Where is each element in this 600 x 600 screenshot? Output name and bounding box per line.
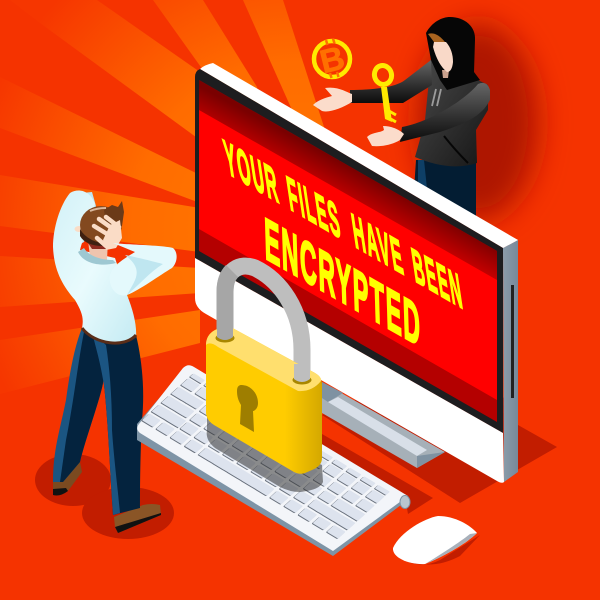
shackle right foot [292, 364, 312, 384]
hand on head [94, 217, 122, 250]
hacker upper hand [313, 88, 352, 111]
monitor side panel [503, 240, 518, 482]
monitor [195, 63, 518, 483]
forearm behind head [70, 192, 96, 250]
screen title band [199, 80, 497, 280]
hacker lower hand [367, 126, 404, 146]
padlock shadow [207, 415, 323, 492]
monitor: BEEN [409, 238, 467, 321]
other hand fingers [74, 226, 84, 232]
right trouser leg [92, 332, 143, 515]
lock body [206, 325, 322, 474]
hacker face [433, 42, 453, 72]
left shoe [53, 462, 82, 495]
left trouser leg [53, 328, 108, 482]
mouse [393, 516, 480, 565]
hacker front arm [400, 83, 490, 142]
screen main red area [199, 110, 497, 400]
man shadows [35, 454, 174, 539]
hacker shadow [418, 24, 538, 220]
padlock [206, 266, 322, 474]
keyboard face [137, 365, 408, 551]
monitor top edge [200, 63, 518, 248]
monitor chin [195, 258, 504, 483]
hoodie strings [432, 89, 441, 106]
collar [78, 248, 116, 265]
shackle left foot [216, 322, 234, 342]
headline line 1: FILES [284, 166, 345, 251]
lock top face [206, 325, 321, 391]
right shoe [114, 504, 161, 533]
headline line 1: YOUR [221, 130, 283, 215]
headline line 1: HAVE [349, 203, 408, 287]
key [372, 64, 396, 122]
raised right arm [110, 243, 177, 295]
hacker body [415, 60, 488, 166]
keyboard shadow [322, 434, 433, 514]
keyboard base [137, 367, 409, 556]
monitor stand [322, 382, 445, 468]
headline line 1 [221, 130, 467, 321]
hacker hood [426, 17, 480, 90]
belt [82, 328, 136, 343]
screen [199, 80, 497, 422]
hoodie pocket [444, 136, 468, 163]
man figure [53, 191, 177, 533]
sunburst rays [0, 0, 325, 394]
shirt torso [53, 191, 136, 343]
bitcoin coin: B [316, 39, 348, 80]
keys [141, 373, 390, 539]
hacker neck [442, 70, 449, 78]
keyhole [237, 385, 258, 432]
shackle [225, 266, 302, 380]
monitor shadow on desk [322, 380, 557, 503]
side slot [511, 285, 514, 398]
hacker hair [428, 33, 445, 42]
monitor bezel [195, 69, 503, 433]
keyboard hinge [400, 496, 410, 508]
keyboard [137, 365, 410, 556]
hacker figure [313, 17, 490, 225]
hacker legs [414, 160, 476, 225]
hair [80, 201, 124, 246]
neck [88, 240, 108, 260]
hacker rear arm [350, 60, 432, 103]
